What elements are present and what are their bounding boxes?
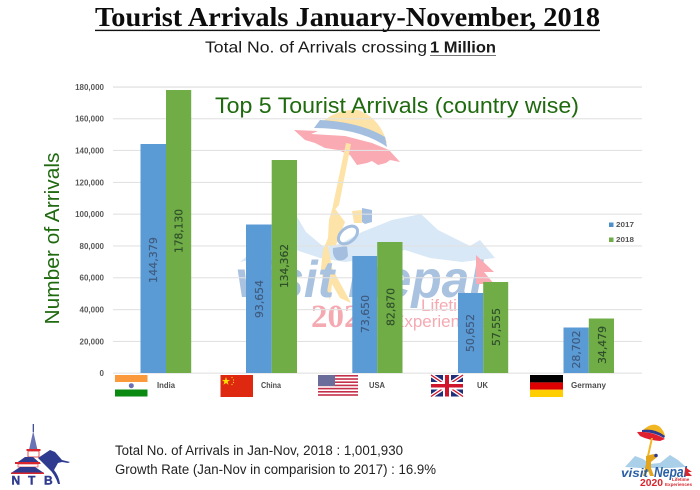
bars: China: 93,654 bbox=[253, 280, 266, 318]
bars: China bbox=[246, 160, 297, 373]
bars: UK: 50,652 bbox=[464, 314, 477, 352]
small umbrella bbox=[637, 425, 665, 456]
watermark tagline: Experiences bbox=[393, 312, 487, 331]
watermark tagline bbox=[393, 296, 487, 331]
summary text: Growth Rate (Jan-Nov in comparision to 2017) : 16.9% bbox=[115, 462, 436, 477]
summary text bbox=[115, 443, 436, 477]
y axis labels: 160,000 bbox=[75, 115, 105, 124]
label: USA: USA bbox=[369, 381, 385, 390]
bars: India bbox=[140, 90, 191, 373]
watermark figure bbox=[321, 206, 372, 303]
bars: India: 178,130 bbox=[172, 209, 186, 253]
NTB initials bbox=[12, 474, 53, 488]
bars: Germany bbox=[564, 318, 614, 373]
small tagline: Lifetime bbox=[672, 477, 690, 482]
watermark umbrella bbox=[294, 110, 400, 212]
small flag bbox=[685, 467, 692, 476]
flag: India bbox=[115, 375, 148, 396]
NTB initials: N bbox=[12, 474, 20, 488]
legend: 2018 bbox=[616, 235, 634, 244]
label: China: China bbox=[261, 381, 281, 390]
flag: USA bbox=[318, 375, 358, 396]
label: India: India bbox=[157, 381, 176, 390]
small year: 2020 bbox=[640, 478, 663, 489]
gridlines bbox=[113, 86, 642, 374]
y axis labels: 100,000 bbox=[75, 210, 105, 219]
flag: UK bbox=[431, 375, 463, 396]
bars: USA bbox=[352, 242, 402, 373]
y axis labels: 60,000 bbox=[80, 274, 105, 283]
watermark mountains bbox=[240, 214, 495, 262]
bars: USA: 73,650 bbox=[359, 295, 372, 333]
watermark tagline: Lifetime bbox=[421, 296, 481, 315]
NTB pagoda bbox=[11, 424, 44, 474]
y axis labels: 180,000 bbox=[75, 83, 105, 92]
NTB mountains bbox=[38, 450, 70, 484]
subtitle: 1 Million bbox=[430, 40, 496, 57]
small mountains bbox=[625, 455, 686, 468]
logo: NTB bbox=[11, 424, 70, 488]
small tagline bbox=[665, 477, 692, 487]
summary text: Total No. of Arrivals in Jan-Nov, 2018 : 1,001,930 bbox=[115, 443, 403, 458]
y axis labels: 40,000 bbox=[80, 306, 105, 314]
y axis labels bbox=[75, 83, 105, 378]
bars: USA: 82,870 bbox=[384, 288, 398, 326]
y axis labels: 0 bbox=[100, 369, 105, 378]
flag: China bbox=[220, 375, 253, 397]
y axis labels: 80,000 bbox=[80, 242, 105, 251]
y axis title: Number of Arrivals bbox=[42, 152, 64, 324]
NTB initials: B bbox=[44, 474, 53, 488]
bars: China: 134,362 bbox=[278, 244, 291, 288]
small figure bbox=[643, 454, 657, 476]
watermark nepal flag bbox=[476, 255, 494, 284]
title: Tourist Arrivals January-November, 2018 bbox=[95, 2, 600, 32]
NTB initials: T bbox=[28, 474, 36, 488]
legend bbox=[609, 220, 634, 244]
label: UK: UK bbox=[477, 381, 488, 390]
bars: India: 144,379 bbox=[147, 237, 160, 283]
subtitle: Total No. of Arrivals crossing bbox=[205, 40, 427, 57]
small wordmark: visit bbox=[621, 466, 649, 480]
watermark wordmark: visit Nepal bbox=[235, 251, 484, 309]
flag: Germany bbox=[530, 375, 563, 397]
logo: Visit Nepal 2020 bbox=[621, 425, 692, 489]
label: Germany: Germany bbox=[571, 381, 607, 390]
bars: Germany: 34,479 bbox=[596, 326, 609, 364]
bars: Germany: 28,702 bbox=[570, 330, 583, 368]
watermark: Visit Nepal 2020 logo bbox=[235, 110, 495, 335]
y axis labels: 120,000 bbox=[75, 178, 105, 187]
logo: Visit Nepal 2020: Nepal bbox=[654, 464, 688, 481]
subtitle bbox=[205, 40, 496, 57]
watermark year: 2020 bbox=[311, 299, 377, 335]
legend: 2017 bbox=[616, 220, 634, 229]
y axis labels: 140,000 bbox=[75, 146, 105, 156]
y axis labels: 20,000 bbox=[80, 337, 105, 346]
bars: UK: 57,555 bbox=[490, 308, 503, 346]
chart heading: Top 5 Tourist Arrivals (country wise) bbox=[215, 93, 579, 118]
bars: UK bbox=[458, 282, 508, 373]
small tagline: Experiences bbox=[665, 482, 692, 487]
